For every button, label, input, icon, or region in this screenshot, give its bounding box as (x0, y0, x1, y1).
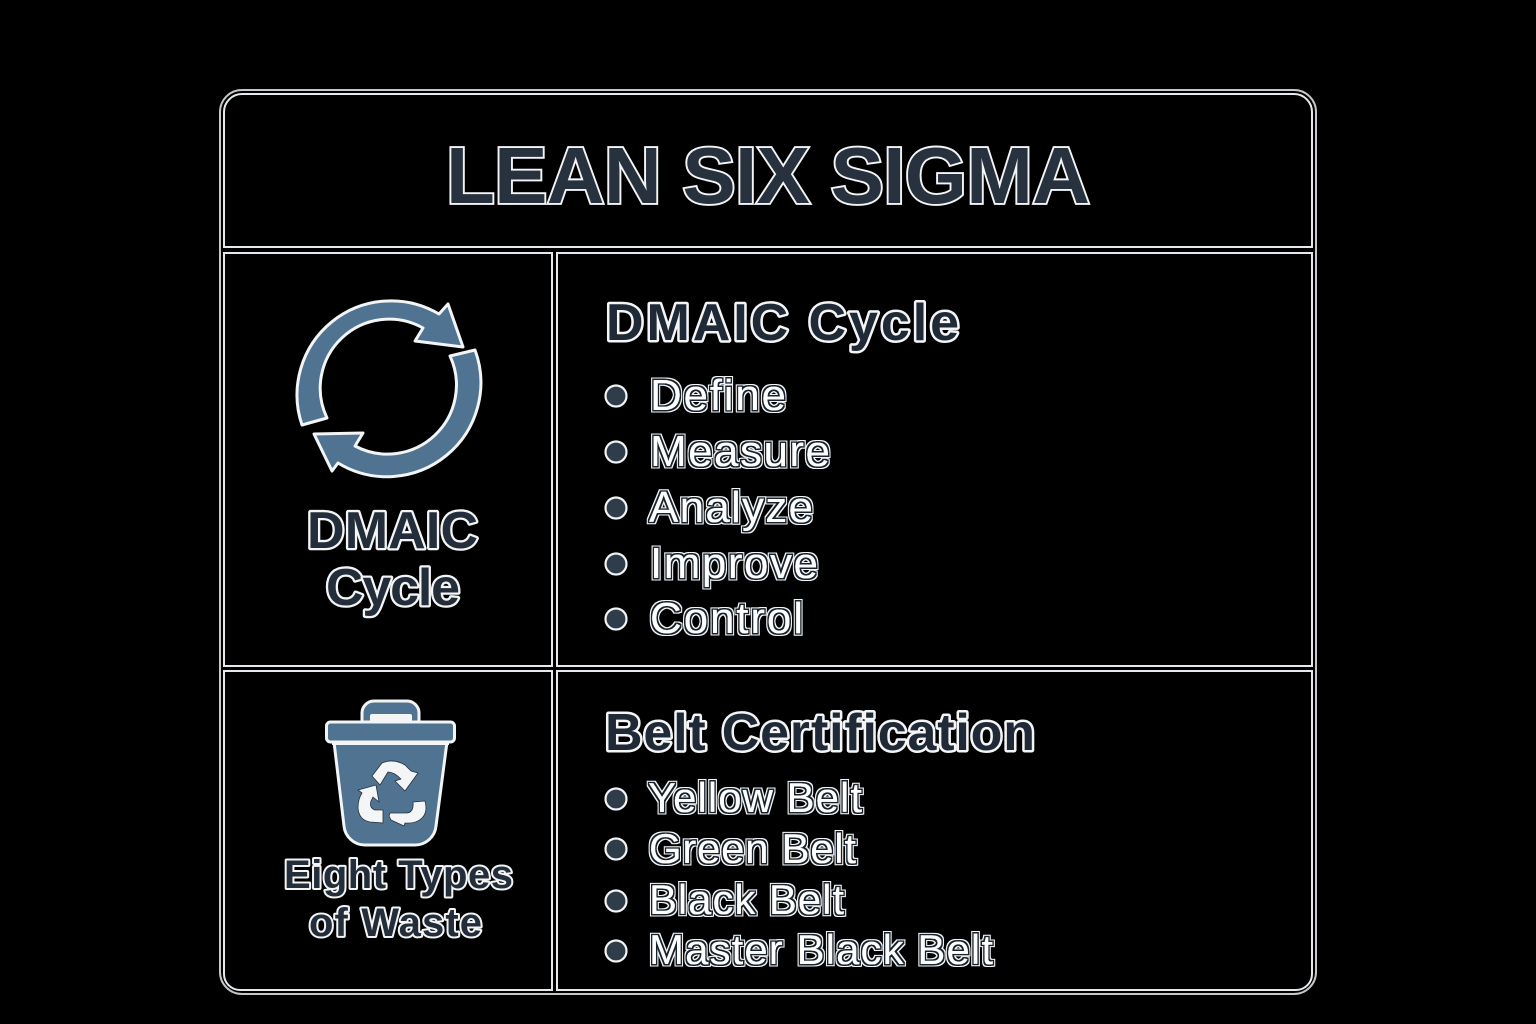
belt list: Green Belt (649, 825, 856, 872)
belt list: Yellow Belt (648, 774, 862, 821)
icon: cycle arrows (297, 301, 481, 477)
eight types of waste label: of Waste (309, 901, 482, 945)
icon: recycling symbol (358, 761, 426, 826)
belt list: Black Belt (649, 876, 844, 923)
DMAIC cycle label: DMAIC (307, 502, 478, 560)
eight types of waste label (284, 853, 513, 945)
panel: waste icon and label (284, 701, 513, 945)
title: LEAN SIX SIGMA (446, 131, 1090, 220)
DMAIC cycle label: Cycle (326, 559, 460, 617)
belt list (606, 774, 993, 973)
panel: DMAIC steps (606, 294, 959, 643)
DMAIC heading: DMAIC Cycle (606, 294, 959, 352)
table frame (220, 90, 1316, 994)
panel: DMAIC icon and label (297, 301, 481, 617)
DMAIC list: Define (650, 371, 786, 420)
DMAIC list: Control (650, 594, 803, 643)
DMAIC list: Analyze (649, 483, 813, 532)
DMAIC list (606, 371, 830, 643)
DMAIC cycle label (307, 502, 478, 617)
DMAIC list: Measure (650, 427, 830, 476)
panel: belt certification (605, 704, 1035, 973)
DMAIC list: Improve (650, 539, 818, 588)
eight types of waste label: Eight Types (284, 853, 513, 897)
icon: recycling bin (326, 701, 454, 845)
belt heading: Belt Certification (605, 704, 1035, 762)
belt list: Master Black Belt (649, 926, 993, 973)
